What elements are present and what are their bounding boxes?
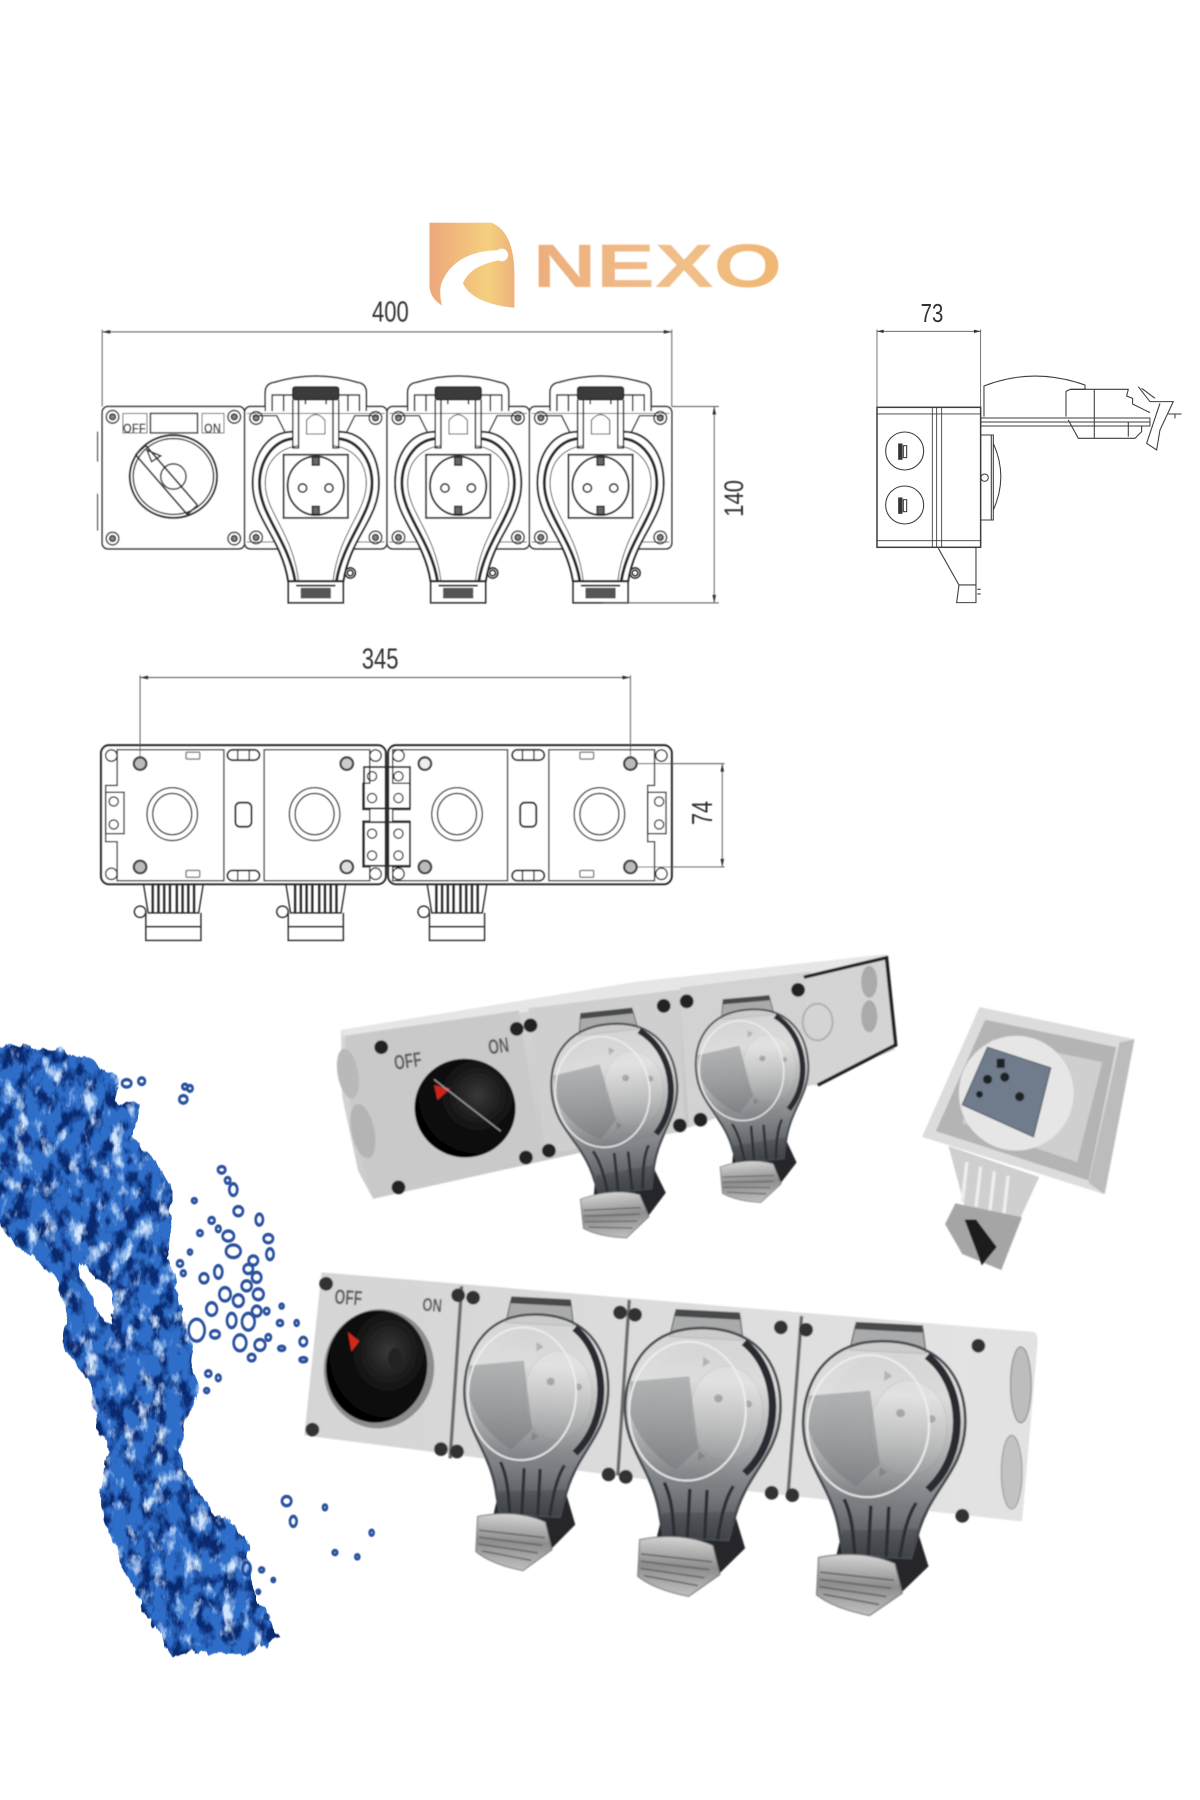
terminal holes: [976, 1059, 1024, 1101]
lower unit lid 1: [455, 1294, 613, 1575]
upper unit lid 1: [544, 1004, 693, 1244]
upper unit OFF label: OFF: [393, 1048, 423, 1075]
lower unit housing: [304, 1272, 1038, 1523]
dimension 74: [637, 764, 725, 867]
lower unit OFF label: OFF: [334, 1286, 363, 1310]
dimension 345: 345: [362, 643, 398, 675]
lower unit lid 2: [615, 1307, 785, 1601]
photo: two-socket switch unit, open end: [333, 954, 896, 1244]
side view enclosure: [877, 407, 1001, 603]
photo: three-socket switch unit: [304, 1272, 1038, 1620]
upper unit switch knob: [407, 1051, 523, 1166]
module cable gland: [945, 1146, 1039, 1270]
water droplets: [122, 1078, 374, 1619]
upper unit lid 2: [690, 992, 820, 1207]
photo: single socket module, open rear: [922, 1007, 1135, 1270]
socket terminal block: [962, 1047, 1051, 1137]
switch ON label: ON: [204, 421, 221, 436]
logo: NEXO: [429, 223, 782, 309]
socket module 2: [387, 376, 529, 603]
lower unit lid 3: [793, 1319, 970, 1620]
upper unit ON label: ON: [487, 1034, 510, 1059]
water splash: [0, 1045, 374, 1652]
cable entry foot 3: [418, 884, 487, 940]
lower unit switch knob: [316, 1302, 442, 1436]
module box: [922, 1007, 1135, 1194]
dimension 140: [603, 406, 749, 603]
dimension 140: 140: [719, 480, 749, 517]
bottom view technical drawing: [101, 643, 725, 940]
switch OFF label: OFF: [123, 421, 146, 436]
dimension 73: [877, 298, 981, 407]
socket module 3: [529, 376, 672, 603]
side view open lid: [981, 376, 1182, 450]
water body: [0, 1045, 282, 1652]
dimension 73: 73: [921, 298, 943, 328]
dimension 400: 400: [372, 297, 409, 329]
dimension 345: [140, 643, 630, 758]
switch module outline: [98, 406, 245, 549]
rear enclosure halves: [101, 745, 672, 884]
logo wordmark: NEXO: [533, 232, 782, 300]
dimension 74: 74: [687, 801, 719, 825]
front view technical drawing: [98, 297, 749, 603]
logo mark: [429, 223, 514, 309]
cable entry foot 1: [134, 884, 203, 940]
socket module 1: [245, 376, 387, 603]
dimension 400: [102, 297, 672, 406]
cable entry foot 2: [277, 884, 346, 940]
lower unit ON label: ON: [422, 1294, 443, 1316]
side view technical drawing: [877, 298, 1182, 603]
upper unit housing: [333, 954, 896, 1199]
